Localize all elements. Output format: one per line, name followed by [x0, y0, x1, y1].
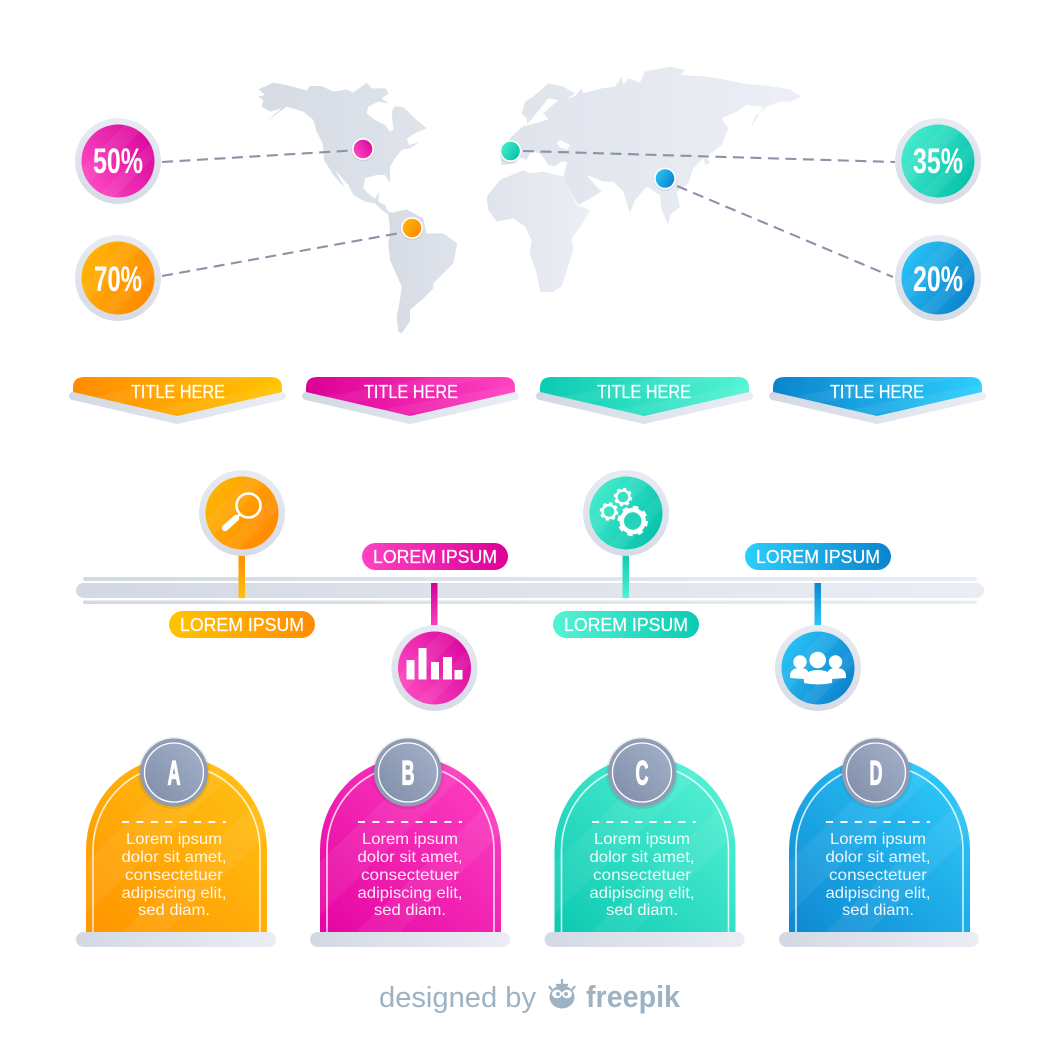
stat: 35%	[895, 118, 981, 204]
stat: 35%: 35%	[913, 142, 963, 181]
connector: 70% to south america	[162, 233, 400, 276]
timeline step: blue people: LOREM IPSUM	[756, 546, 880, 567]
map pin: orange	[400, 217, 424, 240]
timeline step: orange search	[169, 470, 315, 638]
banner: teal title	[540, 377, 749, 420]
text: card D body: consectetuer	[829, 867, 928, 884]
text: card B body: Lorem ipsum	[362, 831, 458, 848]
badge C: C	[636, 754, 648, 792]
footer credit	[379, 979, 681, 1014]
footer credit: freepik	[586, 979, 681, 1014]
icon: gears	[601, 489, 646, 534]
text: card D body: dolor sit amet,	[826, 849, 930, 866]
map: south america	[388, 209, 457, 333]
stat: 50%	[75, 118, 161, 204]
badge B: B	[402, 754, 414, 792]
timeline step: teal gears: LOREM IPSUM	[564, 614, 688, 635]
text: card B body	[358, 831, 462, 919]
text: card C body: sed diam.	[606, 902, 678, 919]
text: card C body	[590, 831, 694, 919]
text: card D body	[826, 831, 930, 919]
footer credit: designed by	[379, 982, 536, 1014]
connector: 50% to north america	[162, 150, 352, 162]
text: card D body: sed diam.	[842, 902, 914, 919]
timeline step: pink bars: LOREM IPSUM	[373, 546, 497, 567]
banner: blue title	[773, 377, 982, 420]
badge A: A	[168, 754, 180, 792]
icon: people	[790, 652, 846, 684]
icon: magnifying glass	[225, 494, 260, 528]
timeline step: teal gears	[553, 470, 699, 638]
timeline step: blue people	[745, 543, 891, 711]
text: card B body: consectetuer	[361, 867, 460, 884]
text: card A body	[122, 831, 226, 919]
stat: 20%: 20%	[913, 260, 963, 299]
badge A	[138, 737, 210, 809]
stat: 70%: 70%	[94, 260, 142, 299]
text: card A body: sed diam.	[138, 902, 210, 919]
text: card A body: adipiscing elit,	[122, 885, 226, 902]
text: card C body: Lorem ipsum	[594, 831, 690, 848]
text: card D body: adipiscing elit,	[826, 885, 930, 902]
map: black sea	[557, 140, 570, 150]
stat: 50%: 50%	[93, 142, 143, 181]
map: americas	[258, 83, 457, 333]
badge C	[606, 737, 678, 809]
text: card B body: sed diam.	[374, 902, 446, 919]
icon: freepik mascot	[549, 979, 575, 1008]
map pin: blue	[654, 168, 676, 191]
timeline step: orange search: LOREM IPSUM	[180, 614, 304, 635]
text: card A body: Lorem ipsum	[126, 831, 222, 848]
text: card B body: adipiscing elit,	[358, 885, 462, 902]
text: card C body: consectetuer	[593, 867, 692, 884]
stat: 70%	[75, 235, 161, 321]
banner: orange title	[73, 377, 282, 420]
text: card D body: Lorem ipsum	[830, 831, 926, 848]
map: north america	[258, 83, 427, 215]
text: card A body: consectetuer	[125, 867, 224, 884]
icon: bar chart	[406, 648, 462, 680]
banner: teal title: TITLE HERE	[597, 382, 691, 402]
connector: 35% to europe	[523, 151, 895, 162]
text: card B body: dolor sit amet,	[358, 849, 462, 866]
stat: 20%	[895, 235, 981, 321]
map pin: magenta	[352, 138, 374, 162]
card D	[779, 737, 979, 947]
banner: orange title: TITLE HERE	[131, 382, 225, 402]
text: card C body: dolor sit amet,	[590, 849, 694, 866]
badge B	[372, 737, 444, 809]
card C	[544, 737, 744, 947]
timeline step: pink bars	[362, 543, 508, 711]
badge D: D	[870, 754, 882, 792]
banner: pink title	[306, 377, 515, 420]
banner: blue title: TITLE HERE	[830, 382, 924, 402]
map: eurasia	[500, 67, 802, 225]
map pin: teal	[499, 140, 522, 164]
banner: pink title: TITLE HERE	[364, 382, 458, 402]
card B	[310, 737, 510, 947]
timeline track	[76, 577, 984, 604]
card A	[76, 737, 276, 947]
map: africa	[487, 170, 590, 292]
connector: 20% to asia	[677, 186, 893, 277]
text: card A body: dolor sit amet,	[122, 849, 226, 866]
map: old world	[487, 67, 802, 292]
badge D	[840, 737, 912, 809]
text: card C body: adipiscing elit,	[590, 885, 694, 902]
world map	[258, 67, 802, 333]
